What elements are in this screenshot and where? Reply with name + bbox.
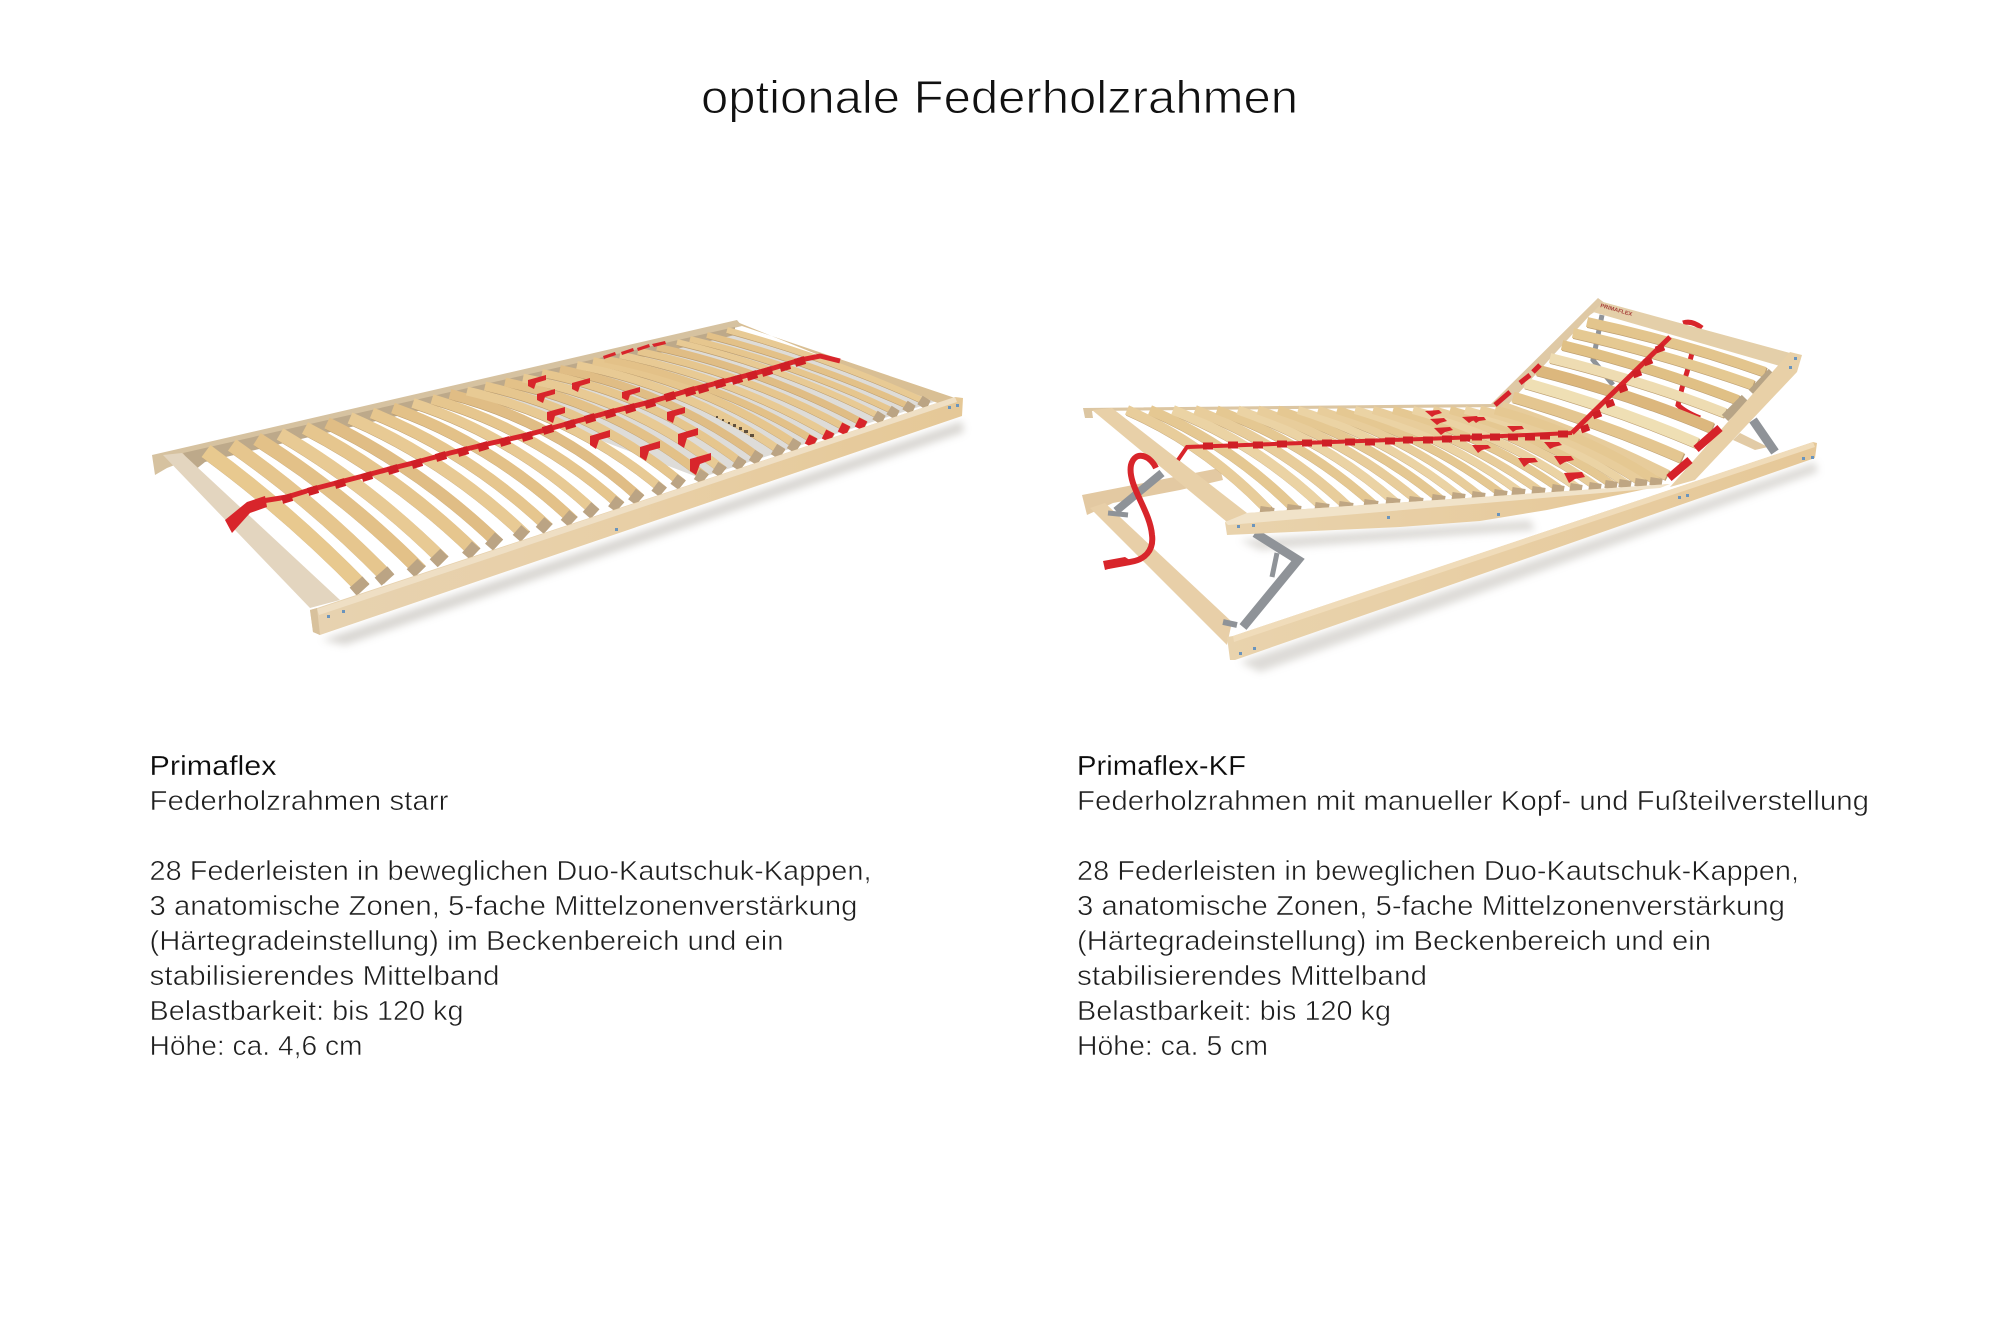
text block: Primaflex-KF xyxy=(1077,750,1869,1061)
front rail xyxy=(310,397,963,635)
headrest slat end blocks xyxy=(1725,372,1772,418)
text block: Primaflex-KF: Belastbarkeit: bis 120 kg xyxy=(1077,995,1391,1026)
text block: Primaflex-KF: Federholzrahmen mit manueller Kopf- und Fußteilverstellung xyxy=(1077,785,1869,816)
headrest front rail xyxy=(1670,352,1802,487)
text block: Primaflex-KF: (Härtegradeinstellung) im Beckenbereich und ein xyxy=(1077,925,1711,956)
text block: Primaflex: Höhe: ca. 4,6 cm xyxy=(150,1030,362,1061)
logo on headrest: PRIMAFLEX xyxy=(1599,303,1633,318)
flat back rail xyxy=(1083,404,1503,418)
headrest top bar xyxy=(1593,302,1790,366)
red adjustment sliders xyxy=(528,341,711,475)
title: optionale Federholzrahmen xyxy=(701,71,1298,123)
product image: Primaflex-KF adjustable slatted frame xyxy=(1082,298,1818,672)
text block: Primaflex-KF: stabilisierendes Mittelband xyxy=(1077,960,1427,991)
head cross bar xyxy=(163,453,340,608)
steel lifting brackets xyxy=(1108,315,1775,627)
product image: Primaflex rigid slatted frame xyxy=(152,320,964,645)
flat section cross bar xyxy=(1092,408,1247,522)
back rail and far rail xyxy=(152,320,955,478)
text block: Primaflex: Federholzrahmen starr xyxy=(150,785,448,816)
red sliders and edge clips xyxy=(1425,410,1585,483)
text block: Primaflex-KF: Höhe: ca. 5 cm xyxy=(1077,1030,1268,1061)
text block: Primaflex: Belastbarkeit: bis 120 kg xyxy=(150,995,464,1026)
sprung slats xyxy=(206,330,928,588)
headrest slats xyxy=(1502,322,1765,475)
text block: Primaflex: stabilisierendes Mittelband xyxy=(150,960,499,991)
flat section front rail xyxy=(1225,484,1670,535)
flat section slats xyxy=(1127,410,1658,510)
headrest side rail xyxy=(1490,298,1606,408)
centre belt xyxy=(1178,337,1670,460)
printed hardness marks xyxy=(716,416,754,437)
text block: Primaflex-KF: Primaflex-KF xyxy=(1077,750,1246,781)
slat caps xyxy=(1260,481,1662,512)
text block: Primaflex: 28 Federleisten in beweglichen Duo-Kautschuk-Kappen, xyxy=(150,855,872,886)
centre belt xyxy=(225,356,840,533)
text block: Primaflex: Primaflex xyxy=(150,750,277,781)
text block: Primaflex xyxy=(150,750,872,1061)
text block: Primaflex-KF: 28 Federleisten in beweglichen Duo-Kautschuk-Kappen, xyxy=(1077,855,1799,886)
pull strap xyxy=(1103,456,1156,570)
mounting screws xyxy=(327,404,959,618)
lower base frame xyxy=(1082,433,1817,660)
mounting screws xyxy=(1237,357,1814,655)
text block: Primaflex-KF: 3 anatomische Zonen, 5-fache Mittelzonenverstärkung xyxy=(1077,890,1785,921)
text block: Primaflex: 3 anatomische Zonen, 5-fache Mittelzonenverstärkung xyxy=(150,890,858,921)
back strap xyxy=(1678,322,1702,418)
slat rubber caps xyxy=(356,400,928,590)
text block: Primaflex: (Härtegradeinstellung) im Beckenbereich und ein xyxy=(150,925,784,956)
